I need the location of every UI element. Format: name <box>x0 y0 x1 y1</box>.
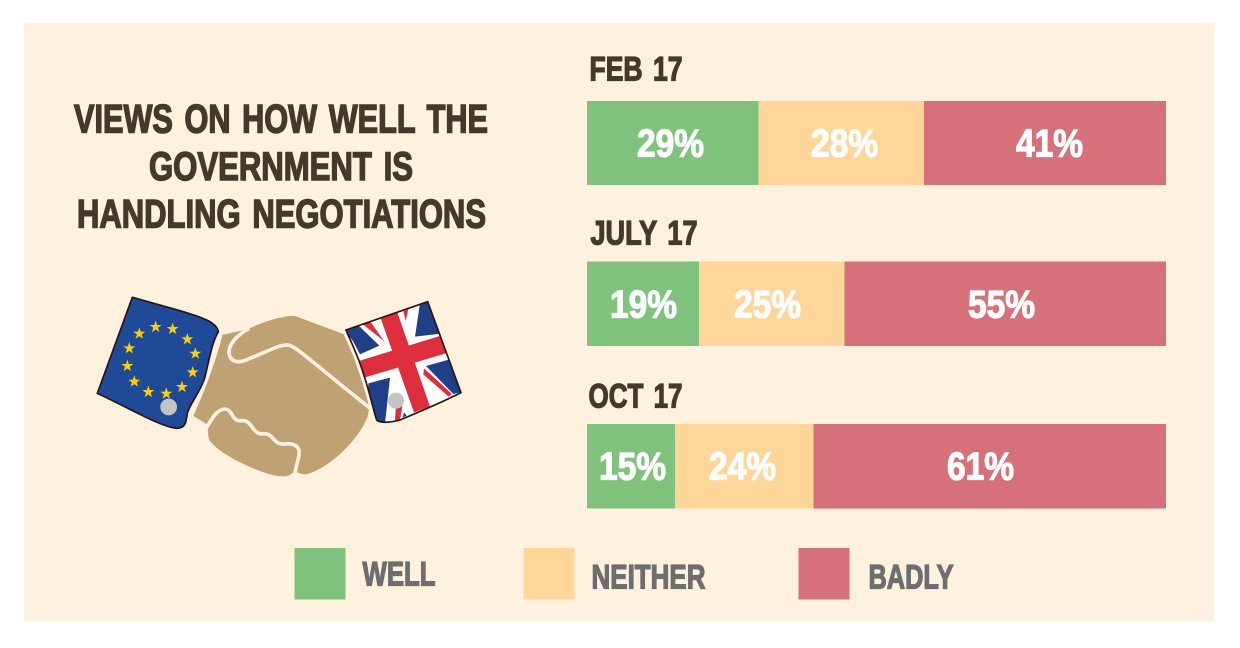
legend item: neither <box>524 548 706 600</box>
stacked bar: 61% <box>947 446 1014 488</box>
stacked bar: 29% <box>637 122 704 166</box>
title: VIEWS ON HOW WELL THE <box>74 98 488 142</box>
row label: JULY 17 <box>590 214 698 252</box>
icon: clasped hands <box>193 316 371 476</box>
stacked bar: 55% <box>968 284 1035 326</box>
stacked bar: 28% <box>811 122 878 166</box>
stacked bar: 25% <box>734 284 801 326</box>
stacked bar: 24% <box>709 446 776 488</box>
title: HANDLING NEGOTIATIONS <box>77 192 486 236</box>
row: Feb 17 <box>587 50 1166 185</box>
stacked bar <box>587 101 1166 185</box>
stacked bar <box>587 262 1166 346</box>
title: GOVERNMENT IS <box>149 145 413 189</box>
legend <box>294 548 954 600</box>
row: Oct 17 <box>587 378 1166 508</box>
icon: handshake with EU and UK flag cuffs <box>97 293 473 476</box>
row: July 17 <box>587 214 1166 346</box>
title <box>74 98 488 236</box>
stacked bar: 15% <box>599 446 666 488</box>
legend item: badly: BADLY <box>868 558 954 596</box>
legend item: well <box>294 548 436 600</box>
stacked bar: 19% <box>610 284 677 326</box>
legend item: badly <box>798 548 954 600</box>
row label: FEB 17 <box>590 50 682 88</box>
stacked bar <box>587 424 1166 508</box>
icon: UK flag cuff <box>344 300 462 424</box>
legend item: neither: NEITHER <box>592 558 706 596</box>
stacked bar: 41% <box>1016 122 1083 166</box>
row label: OCT 17 <box>588 378 682 416</box>
legend item: well: WELL <box>362 556 436 594</box>
icon: EU flag cuff <box>97 297 218 428</box>
